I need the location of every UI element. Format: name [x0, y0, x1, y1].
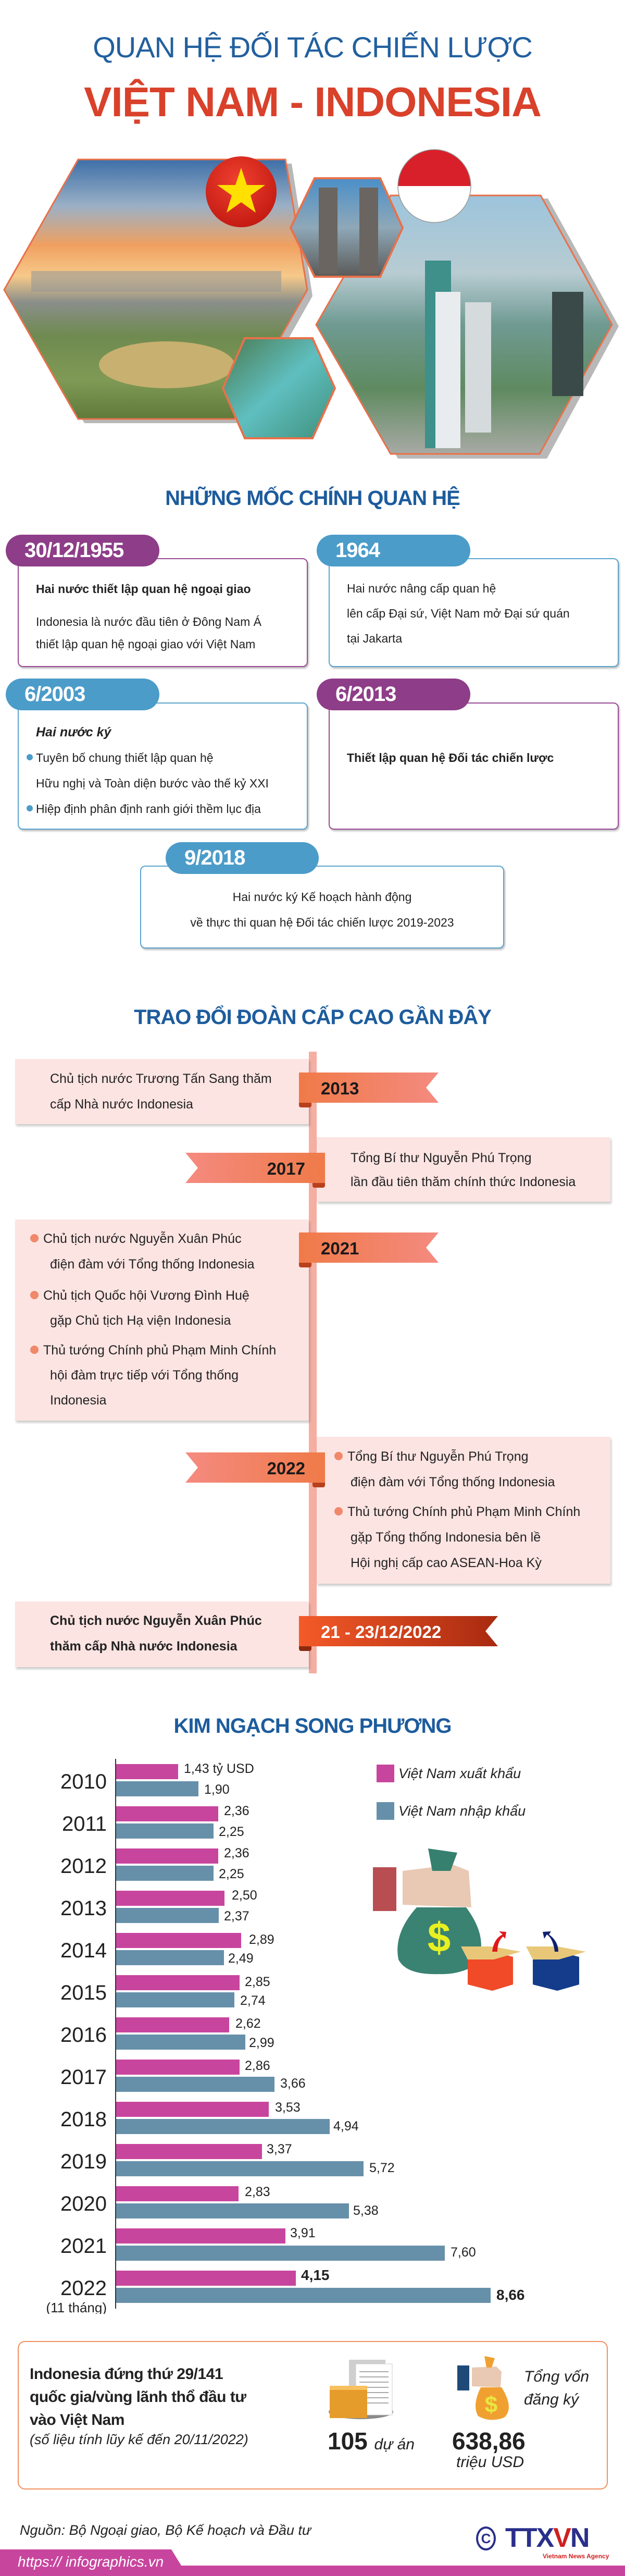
bar chart: 2010: [60, 1770, 107, 1793]
event box 2021: [15, 1219, 309, 1421]
panel: 9/2018: [140, 842, 506, 951]
logo: TTXVN: TTXVN: [505, 2523, 589, 2553]
bar chart: 5,38: [353, 2203, 379, 2218]
ribbon 21-23/12/2022: [299, 1616, 498, 1651]
legend: import: [377, 1802, 394, 1820]
bar chart: 2019: [60, 2150, 107, 2173]
bar chart: 2012: [60, 1855, 107, 1878]
ribbon 2022: [185, 1452, 325, 1487]
title line 1: QUAN HỆ ĐỐI TÁC CHIẾN LƯỢC: [93, 31, 532, 64]
card text: Hai nước ký Kế hoạch hành động: [233, 890, 411, 904]
bar chart: 2,86: [245, 2059, 270, 2073]
legend: [377, 1765, 526, 1820]
stat: capital: đăng ký: [524, 2391, 579, 2408]
panel: investment: 638,86: [452, 2427, 526, 2455]
ribbon 2013: [299, 1073, 439, 1107]
bar chart: 3,91: [290, 2226, 316, 2240]
bar chart: 2020: [60, 2192, 107, 2215]
event box state visit: [15, 1601, 309, 1667]
date tab: 1964: [335, 539, 380, 562]
timeline: Tổng Bí thư Nguyễn Phú Trọng: [351, 1151, 531, 1165]
bar chart: 2014: [60, 1939, 107, 1962]
date tab: [6, 679, 159, 710]
panel: 30/12/1955: Indonesia là nước đầu tiên ở Đông Nam Á: [36, 615, 261, 628]
panel: 6/2003: Hữu nghị và Toàn diện bước vào thế kỷ XXI: [36, 777, 269, 790]
hexagon: Bali gate: [291, 178, 403, 277]
heading: bilateral trade: KIM NGẠCH SONG PHƯƠNG: [174, 1715, 451, 1737]
bar chart: 2,89: [249, 1932, 274, 1947]
bar chart: 2016: [60, 2024, 107, 2047]
stat: projects: 105 dự án: [328, 2427, 415, 2455]
bar chart: 7,60: [451, 2245, 476, 2260]
timeline: Tổng Bí thư Nguyễn Phú Trọng: [347, 1449, 528, 1464]
timeline: thăm cấp Nhà nước Indonesia: [50, 1639, 238, 1654]
heading: high-level exchanges: TRAO ĐỔI ĐOÀN CẤP CAO GẦN ĐÂY: [134, 1006, 491, 1029]
bar chart: 5,72: [369, 2161, 395, 2175]
date tab: 6/2013: [335, 683, 396, 706]
date tab: [6, 535, 159, 566]
investment text: quốc gia/vùng lãnh thổ đầu tư: [30, 2388, 246, 2406]
timeline: gặp Chủ tịch Hạ viện Indonesia: [50, 1313, 231, 1328]
panel: 9/2018: về thực thi quan hệ Đối tác chiến lược 2019-2023: [190, 916, 454, 929]
ribbon 2017: [185, 1153, 325, 1188]
timeline: Chủ tịch nước Nguyễn Xuân Phúc: [43, 1231, 242, 1246]
timeline: [15, 1052, 612, 1673]
icon: Indonesia flag: [397, 149, 471, 223]
timeline: Chủ tịch Quốc hội Vương Đình Huệ: [43, 1288, 249, 1303]
panel: 6/2003: [6, 679, 310, 832]
bar chart: 3,66: [280, 2076, 306, 2091]
timeline: Thủ tướng Chính phủ Phạm Minh Chính: [43, 1343, 276, 1358]
bar chart: 2015: [60, 1981, 107, 2004]
card text: Hai nước nâng cấp quan hệ: [347, 582, 496, 595]
logo: TTXVN: C: [481, 2531, 491, 2546]
timeline: điện đàm với Tổng thống Indonesia: [50, 1257, 255, 1272]
bar chart: 2,99: [249, 2036, 274, 2050]
date tab: 9/2018: [184, 846, 245, 869]
panel: 30/12/1955: thiết lập quan hệ ngoại giao với Việt Nam: [36, 637, 255, 651]
investment text: [30, 2365, 246, 2429]
bar chart: 1,43 tỷ USD: [184, 1761, 254, 1776]
icon: hand with money bag and boxes: [373, 1848, 586, 1991]
bar chart: 2,85: [245, 1975, 270, 1989]
ribbon 21-23/12/2022: 21 - 23/12/2022: [321, 1622, 441, 1642]
icon: Vietnam flag: [206, 156, 277, 227]
bar chart: 2,25: [219, 1825, 244, 1839]
source note: Nguồn: Bộ Ngoại giao, Bộ Kế hoạch và Đầu tư: [20, 2522, 311, 2538]
logo: TTXVN: Vietnam News Agency: [543, 2553, 609, 2560]
panel: 1964: tại Jakarta: [347, 632, 402, 645]
panel: 6/2003: Tuyên bố chung thiết lập quan hệ: [36, 751, 214, 765]
panel: 1964: lên cấp Đại sứ, Việt Nam mở Đại sứ quán: [347, 607, 570, 620]
bar chart: 2,62: [235, 2016, 261, 2031]
date tab: 6/2003: [24, 683, 85, 706]
event box 2022: [317, 1437, 610, 1584]
date tab: [317, 679, 470, 710]
icon: hand money bag: [457, 2356, 509, 2420]
panel: 1964: [317, 535, 621, 670]
investment text: Indonesia đứng thứ 29/141: [30, 2365, 223, 2383]
date tab: 30/12/1955: [24, 539, 123, 562]
ribbon 2021: 2021: [321, 1239, 359, 1258]
timeline: Hội nghị cấp cao ASEAN-Hoa Kỳ: [351, 1556, 542, 1570]
bar chart: 2011: [62, 1813, 107, 1835]
ribbon 2017: 2017: [267, 1159, 305, 1178]
bar chart: 2,50: [232, 1888, 257, 1903]
bar chart: 2013: [60, 1897, 107, 1920]
bar chart: 2,49: [228, 1951, 254, 1966]
bar chart: 2,36: [224, 1804, 249, 1818]
bar chart: 2022: [60, 2277, 107, 2300]
legend: Việt Nam nhập khẩu: [398, 1803, 526, 1819]
bar chart: 8,66: [496, 2287, 525, 2303]
card box: [18, 558, 308, 667]
card text: Hai nước thiết lập quan hệ ngoại giao: [36, 582, 251, 596]
panel: 6/2013: [317, 679, 621, 832]
timeline: Chủ tịch nước Nguyễn Xuân Phúc: [50, 1613, 262, 1628]
bar chart: 2,83: [245, 2185, 270, 2199]
timeline: gặp Tổng thống Indonesia bên lề: [351, 1530, 541, 1545]
timeline: Indonesia: [50, 1393, 106, 1408]
bar chart: 2,74: [240, 1993, 266, 2008]
icon: documents: [329, 2360, 393, 2419]
timeline: Chủ tịch nước Trương Tấn Sang thăm: [50, 1071, 272, 1086]
panel: investment: triệu USD: [456, 2454, 524, 2471]
hero images: hexagons: [3, 149, 619, 459]
date tab: [166, 842, 319, 874]
title line 2: VIỆT NAM - INDONESIA: [84, 79, 541, 125]
heading: milestones: NHỮNG MỐC CHÍNH QUAN HỆ: [165, 487, 460, 510]
bar chart: 2017: [60, 2066, 107, 2089]
bar chart: [46, 1759, 525, 2314]
panel: 30/12/1955: [6, 535, 310, 670]
bar chart: 4,94: [333, 2119, 359, 2134]
card text: Thiết lập quan hệ Đối tác chiến lược: [347, 751, 554, 765]
stat: capital: [524, 2368, 589, 2408]
bar chart: 1,90: [204, 1782, 230, 1797]
bar chart: 4,15: [301, 2267, 329, 2283]
timeline: hội đàm trực tiếp với Tổng thống: [50, 1368, 239, 1383]
bar chart: 2,36: [224, 1846, 249, 1860]
hexagon: Hanoi: [4, 159, 312, 423]
timeline: Thủ tướng Chính phủ Phạm Minh Chính: [347, 1505, 580, 1519]
card text: Hai nước ký: [36, 725, 111, 739]
bar chart: 2,25: [219, 1867, 244, 1881]
icon: hand with money bag and boxes: $: [428, 1914, 451, 1961]
timeline vertical line: [309, 1052, 317, 1673]
panel: investment: [18, 2341, 608, 2489]
timeline: lần đầu tiên thăm chính thức Indonesia: [351, 1175, 576, 1189]
hexagon: Ha Long bay: [223, 338, 335, 438]
bar chart: 3,37: [267, 2142, 292, 2156]
event box 2017: [317, 1137, 610, 1202]
ribbon 2022: 2022: [267, 1459, 305, 1478]
bar chart: 2021: [60, 2235, 107, 2258]
footer band: [0, 2549, 625, 2576]
timeline: điện đàm với Tổng thống Indonesia: [351, 1475, 555, 1489]
hexagon: Jakarta: [316, 195, 619, 459]
panel: investment: (số liệu tính lũy kế đến 20/11/2022): [30, 2432, 248, 2447]
bar chart: 3,53: [275, 2100, 301, 2115]
icon: hand money bag: $: [485, 2392, 497, 2418]
footer url: https:// infographics.vn: [18, 2554, 164, 2570]
event box 2013: [15, 1059, 309, 1124]
timeline: cấp Nhà nước Indonesia: [50, 1097, 193, 1112]
date tab: [317, 535, 470, 566]
panel: 6/2003: Hiệp định phân định ranh giới thềm lục địa: [36, 802, 261, 816]
logo: TTXVN: [476, 2523, 609, 2560]
bar chart: 2,37: [224, 1909, 249, 1924]
legend: Việt Nam xuất khẩu: [398, 1766, 521, 1781]
ribbon 2021: [299, 1232, 439, 1267]
legend: export: [377, 1765, 394, 1782]
bar chart: 2018: [60, 2108, 107, 2131]
investment text: vào Việt Nam: [30, 2411, 124, 2429]
stat: capital: Tổng vốn: [524, 2368, 589, 2385]
ribbon 2013: 2013: [321, 1079, 359, 1098]
